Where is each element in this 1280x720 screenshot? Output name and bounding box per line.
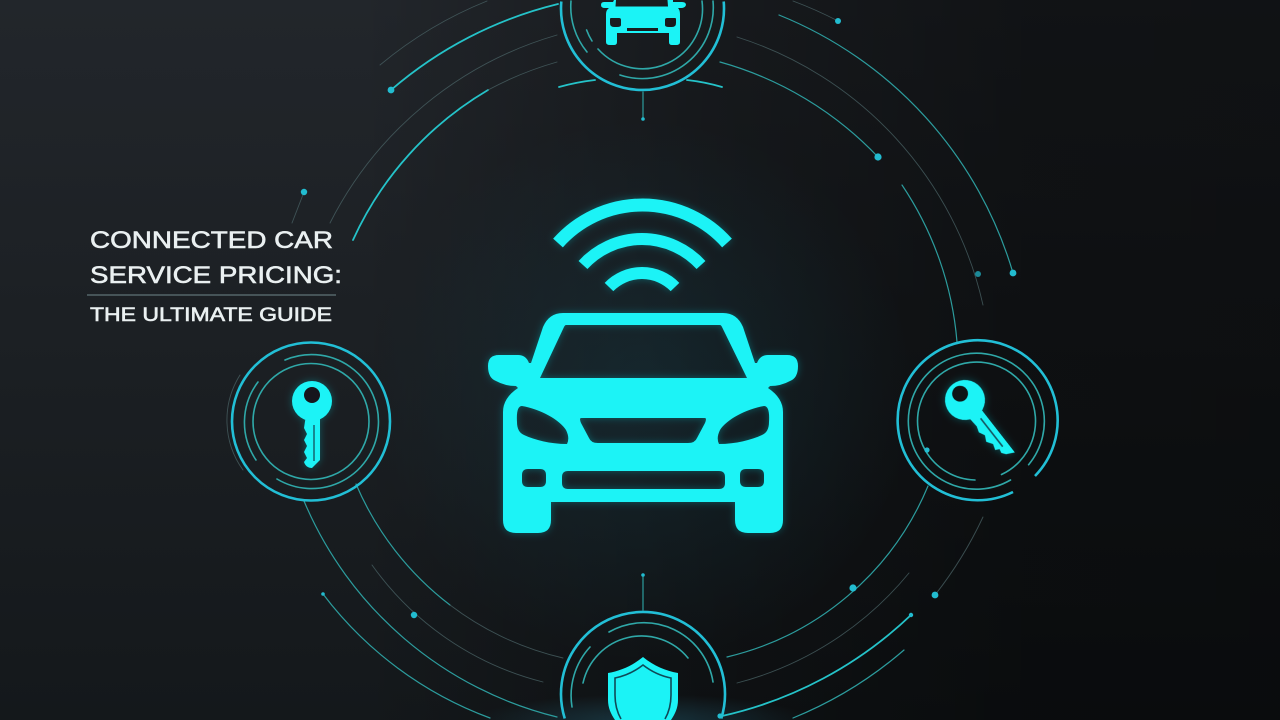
icon: angled key: [937, 372, 1025, 469]
icon: top car badge: [559, 0, 724, 121]
heading line 1: CONNECTED CAR: [90, 227, 333, 254]
title block: [87, 227, 342, 326]
icon: bottom shield badge: [561, 573, 725, 720]
subtitle: THE ULTIMATE GUIDE: [90, 304, 332, 326]
icon: right key badge: [898, 340, 1058, 500]
orbit arcs: lower left: [304, 484, 563, 718]
icon: key: [292, 381, 332, 468]
heading line 2: SERVICE PRICING:: [90, 262, 342, 289]
icon: left key badge: [227, 342, 390, 500]
orbit arcs: upper left: [292, 1, 558, 240]
icon: wifi signal: [558, 205, 727, 287]
orbit arcs: upper right: [720, 1, 1016, 342]
orbit arcs: lower right: [722, 486, 983, 718]
icon: central car: [488, 313, 798, 533]
